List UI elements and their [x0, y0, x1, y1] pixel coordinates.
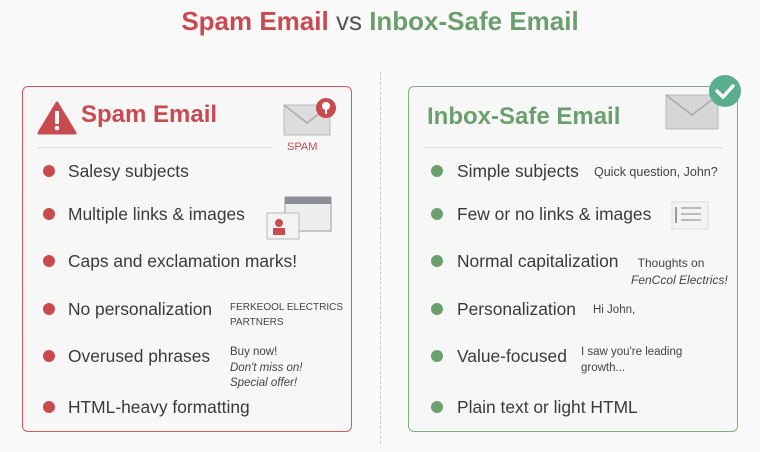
panel: spam: Salesy subjects: [68, 161, 189, 181]
panel: spam: Don't miss on!: [230, 362, 302, 374]
panel: spam: PARTNERS: [230, 317, 284, 328]
panel: inbox-safe: growth...: [581, 362, 625, 374]
heading: Inbox-Safe Email: [427, 103, 620, 130]
panel: inbox-safe: Thoughts on: [638, 256, 704, 270]
panel: inbox-safe: Quick question, John?: [594, 165, 718, 179]
icon: warning: [38, 101, 77, 134]
panel: spam: FERKEOOL ELECTRICS: [230, 302, 343, 313]
panel: spam: Overused phrases: [68, 346, 210, 366]
panel: inbox-safe: I saw you're leading: [581, 346, 682, 358]
title: Spam Email vs Inbox-Safe Email: [181, 6, 579, 36]
panel: spam: Caps and exclamation marks!: [68, 251, 297, 271]
panel: inbox-safe: Few or no links & images: [457, 204, 651, 224]
divider dashed: [380, 72, 381, 444]
icon: links images: [266, 196, 332, 240]
panel: inbox-safe: [408, 86, 738, 432]
icon: envelope spam: SPAM: [287, 141, 317, 153]
panel: spam: HTML-heavy formatting: [68, 397, 250, 417]
panel: spam: Multiple links & images: [68, 204, 245, 224]
panel: spam: No personalization: [68, 299, 212, 319]
panel: spam: [22, 86, 352, 432]
panel: spam: Buy now!: [230, 346, 277, 358]
panel: inbox-safe: Simple subjects: [457, 161, 579, 181]
panel: inbox-safe: Plain text or light HTML: [457, 397, 638, 417]
heading: Spam Email: [81, 101, 217, 128]
panel: spam: Special offer!: [230, 377, 297, 389]
panel: inbox-safe: Value-focused: [457, 346, 567, 366]
panel: inbox-safe: Personalization: [457, 299, 576, 319]
panel: inbox-safe: FenCcol Electrics!: [631, 273, 728, 287]
icon: envelope check: [666, 75, 741, 130]
icon: plain doc: [672, 202, 708, 230]
panel: inbox-safe: Normal capitalization: [457, 251, 618, 271]
icon: envelope spam: [284, 98, 336, 153]
panel: inbox-safe: Hi John,: [593, 304, 635, 316]
bullets: [43, 165, 55, 177]
